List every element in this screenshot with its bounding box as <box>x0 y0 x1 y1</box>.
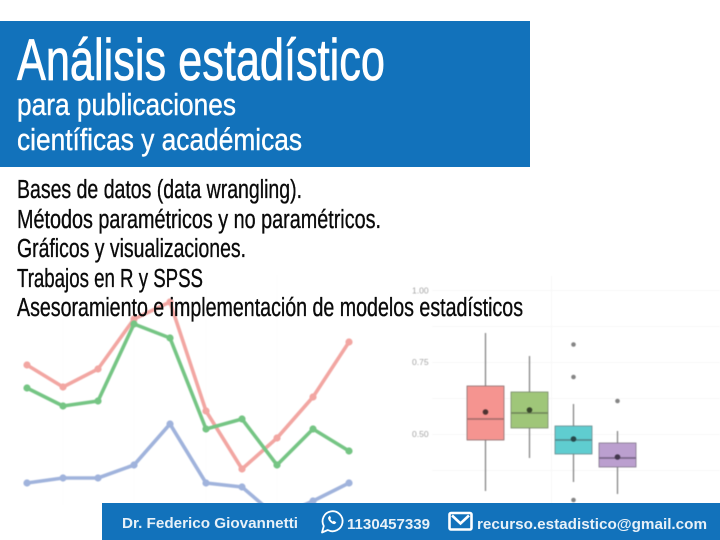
axis labels: 0.75 <box>412 357 429 367</box>
services list <box>17 176 523 322</box>
services list: Gráficos y visualizaciones. <box>17 235 246 263</box>
contact footer <box>102 503 720 540</box>
box plot <box>412 276 720 505</box>
red series <box>23 298 353 473</box>
box: green <box>511 392 548 428</box>
axis labels <box>412 286 429 439</box>
title banner <box>0 21 530 167</box>
services list: Bases de datos (data wrangling). <box>17 176 302 204</box>
subtitle line 2: científicas y académicas <box>17 122 302 157</box>
email: recurso.estadistico@gmail.com <box>477 516 707 533</box>
subtitle line 1: para publicaciones <box>17 87 236 122</box>
contact name: Dr. Federico Giovannetti <box>122 516 298 532</box>
whiskers <box>486 333 618 494</box>
line chart <box>23 275 353 517</box>
axis labels: 0.50 <box>412 429 429 439</box>
services list: Métodos paramétricos y no paramétricos. <box>17 206 381 234</box>
phone number: 1130457339 <box>347 516 430 533</box>
title: Análisis estadístico <box>17 28 385 93</box>
icon: envelope <box>450 513 472 530</box>
box: teal <box>555 426 592 454</box>
axis labels: 1.00 <box>412 286 429 296</box>
box: red <box>467 386 504 440</box>
icon: whatsapp <box>322 511 343 532</box>
box: purple <box>599 443 636 467</box>
blue series <box>23 420 353 517</box>
services list: Asesoramiento e implementación de modelos estadísticos <box>17 294 523 322</box>
green series <box>23 320 353 469</box>
services list: Trabajos en R y SPSS <box>17 265 203 293</box>
outliers <box>571 342 620 502</box>
